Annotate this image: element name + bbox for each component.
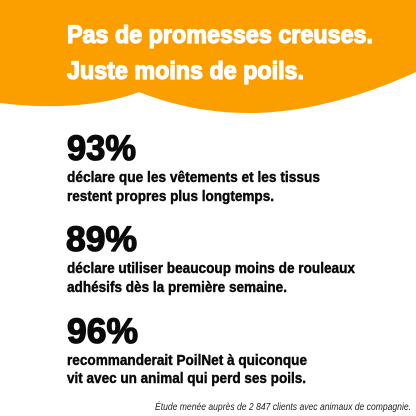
statistic: 89%: adhésifs dès la première semaine. xyxy=(67,279,287,296)
statistic: 96% xyxy=(67,312,307,387)
statistic: 93%: 93% xyxy=(67,129,136,168)
statistic: 93%: restent propres plus longtemps. xyxy=(67,188,274,205)
title xyxy=(67,21,373,85)
statistic: 89%: 89% xyxy=(66,220,137,259)
statistic: 96%: 96% xyxy=(67,312,138,351)
statistic: 93%: déclare que les vêtements et les tissus xyxy=(67,169,320,186)
statistic: 96%: vit avec un animal qui perd ses poils. xyxy=(67,370,306,387)
title: Pas de promesses creuses. xyxy=(67,21,373,49)
statistic: 93% xyxy=(67,129,320,205)
statistic: 89%: déclare utiliser beaucoup moins de rouleaux xyxy=(67,260,356,277)
statistic: 96%: recommanderait PoilNet à quiconque xyxy=(67,352,307,369)
orange wavy header band xyxy=(0,0,416,113)
statistic: 89% xyxy=(66,220,356,296)
title: Juste moins de poils. xyxy=(67,57,304,85)
